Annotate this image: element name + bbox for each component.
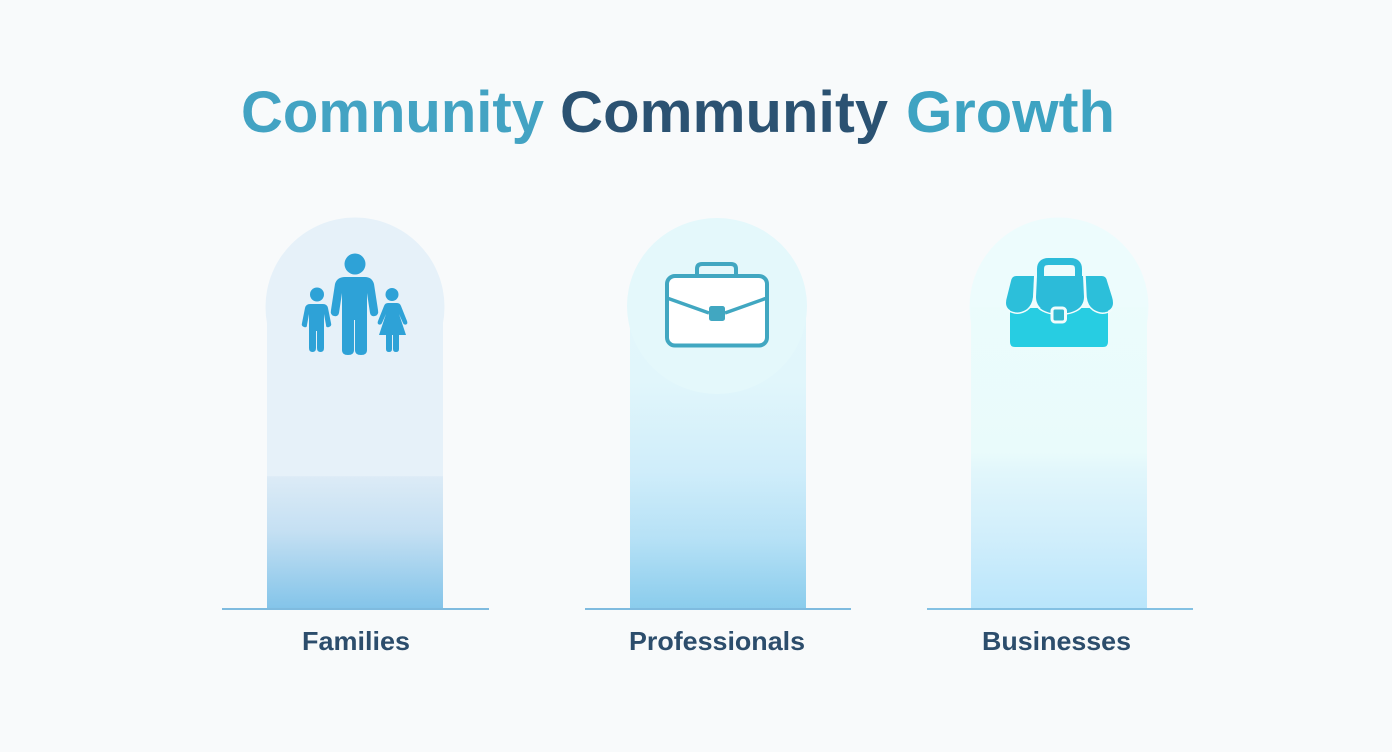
title [241,80,1115,145]
title: Comnunity [241,80,544,145]
column: businesses [970,218,1148,609]
baseline: professionals [585,608,851,610]
icon: family [302,254,407,355]
column: professionals [627,218,807,609]
title: Community [560,80,888,145]
panel: professionals [585,218,851,656]
icon: toolbox bag [1006,262,1113,347]
label: professionals: Professionals [629,626,805,656]
icon: briefcase [667,264,767,346]
column: families [266,218,444,609]
title: Growth [906,80,1115,145]
label: businesses: Businesses [982,626,1131,656]
label: families: Families [302,626,410,656]
baseline: families [222,608,489,610]
panel: families [222,218,489,656]
baseline: businesses [927,608,1193,610]
panel: businesses [927,218,1193,656]
